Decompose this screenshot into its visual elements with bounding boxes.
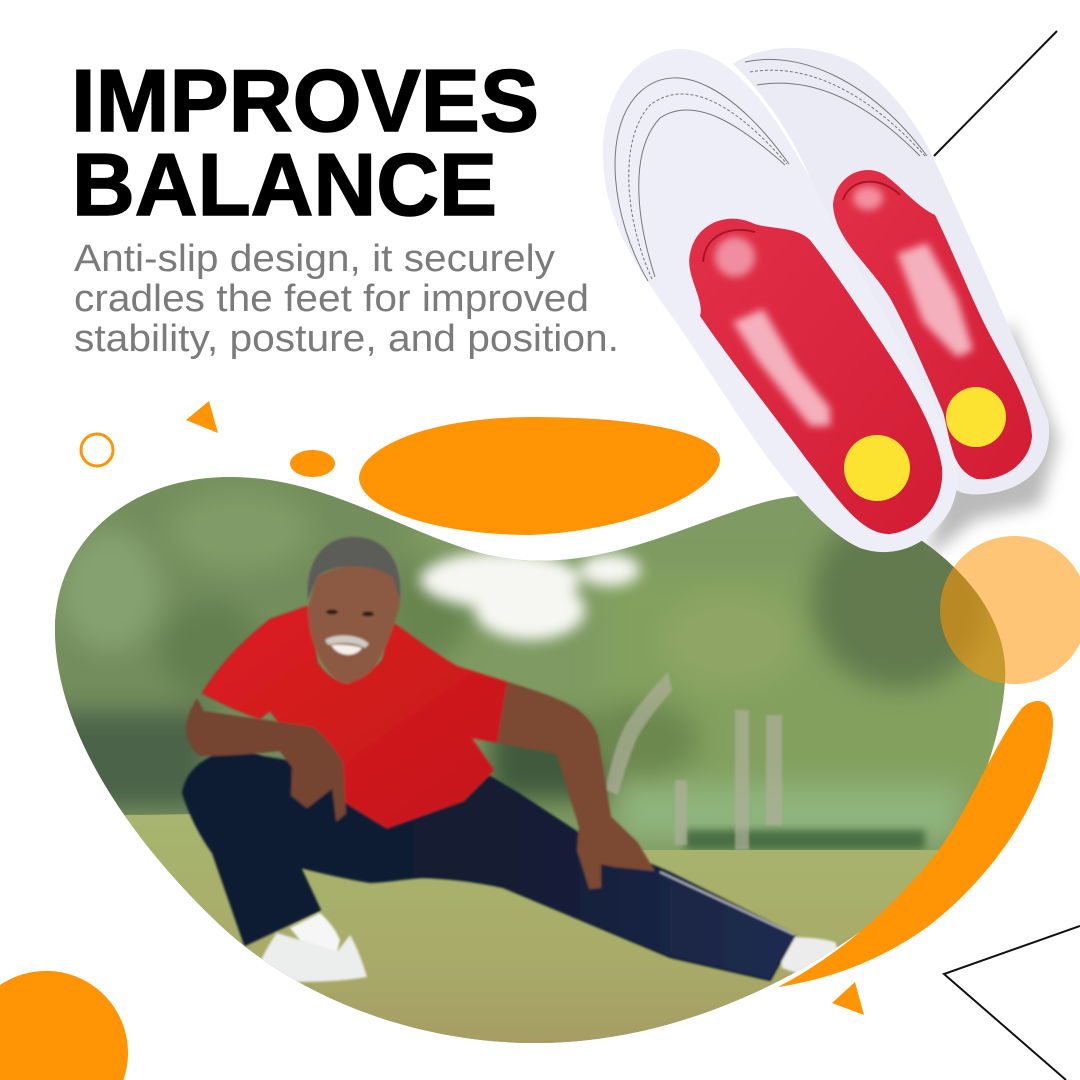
decoration: black chevron bottom right [944, 926, 1080, 1080]
decoration: translucent orange circle [940, 536, 1080, 684]
man: left arm and hand [187, 700, 345, 820]
photo hedge [685, 830, 925, 850]
photo: man stretching in park [40, 470, 1020, 1060]
decoration: orange ring [81, 434, 113, 466]
description text: stability, posture, and position. [74, 318, 619, 360]
photo grass [124, 814, 938, 1043]
man: trousers [183, 753, 795, 980]
man: shirt [203, 607, 508, 827]
insole shadow [925, 320, 1058, 560]
decoration: orange triangle bottom [832, 982, 864, 1015]
right insole [733, 48, 1049, 495]
man: far shoe and sock [780, 937, 838, 974]
man: near shoe and sock [257, 913, 367, 982]
man: right arm and hand [498, 683, 653, 888]
left insole [603, 49, 957, 552]
photo tree trunks [605, 672, 782, 850]
title: IMPROVES [71, 51, 539, 150]
decoration: orange swoosh [778, 701, 1053, 987]
decoration: small orange oval [290, 450, 335, 477]
photo background trees [40, 470, 1020, 840]
decoration: orange top blob [359, 417, 720, 535]
man: head [308, 537, 400, 683]
title [71, 51, 539, 234]
man: trouser stripe [660, 872, 795, 935]
insoles product image [603, 48, 1058, 560]
decoration: orange triangle top [186, 401, 218, 433]
description text: Anti-slip design, it securely [74, 238, 555, 280]
description text: cradles the feet for improved [74, 278, 589, 320]
description text [74, 238, 619, 360]
decoration: orange quarter circle [0, 971, 128, 1080]
photo sky [420, 552, 640, 640]
decoration: black line top right [934, 31, 1057, 156]
man figure [183, 537, 838, 982]
title: BALANCE [72, 135, 497, 234]
